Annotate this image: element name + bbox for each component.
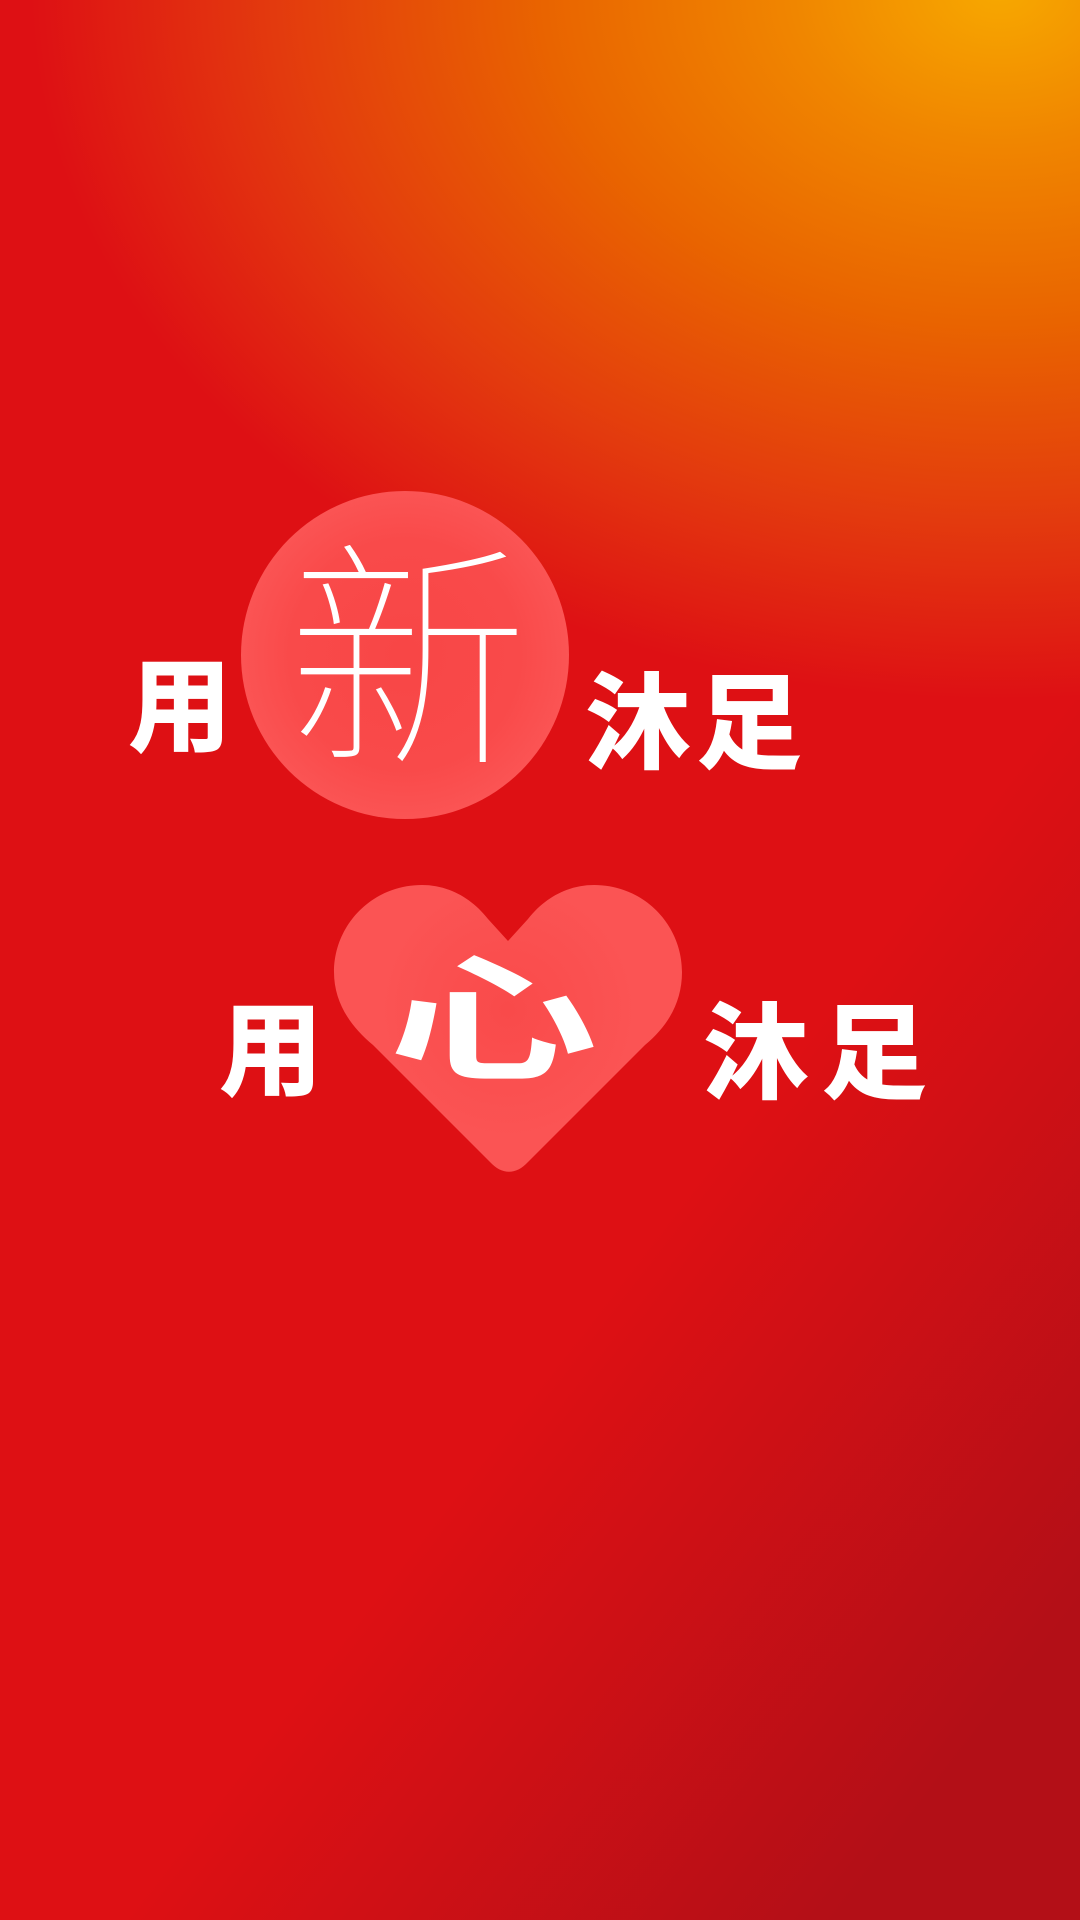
text: 用: 用: [220, 995, 322, 1109]
large thin character: 新: 新: [286, 528, 530, 798]
text: 沐: 沐: [586, 667, 690, 783]
headline row one: 用新沐足: [129, 491, 801, 819]
text: 足: 足: [697, 667, 801, 783]
large character: 心: 心: [388, 946, 598, 1098]
text: 用: 用: [129, 651, 231, 765]
text: 沐: 沐: [704, 997, 808, 1113]
heart badge: [334, 885, 682, 1172]
headline row two: 用心沐足: [220, 885, 926, 1172]
circle badge: [241, 491, 569, 819]
text: 足: 足: [822, 997, 926, 1113]
